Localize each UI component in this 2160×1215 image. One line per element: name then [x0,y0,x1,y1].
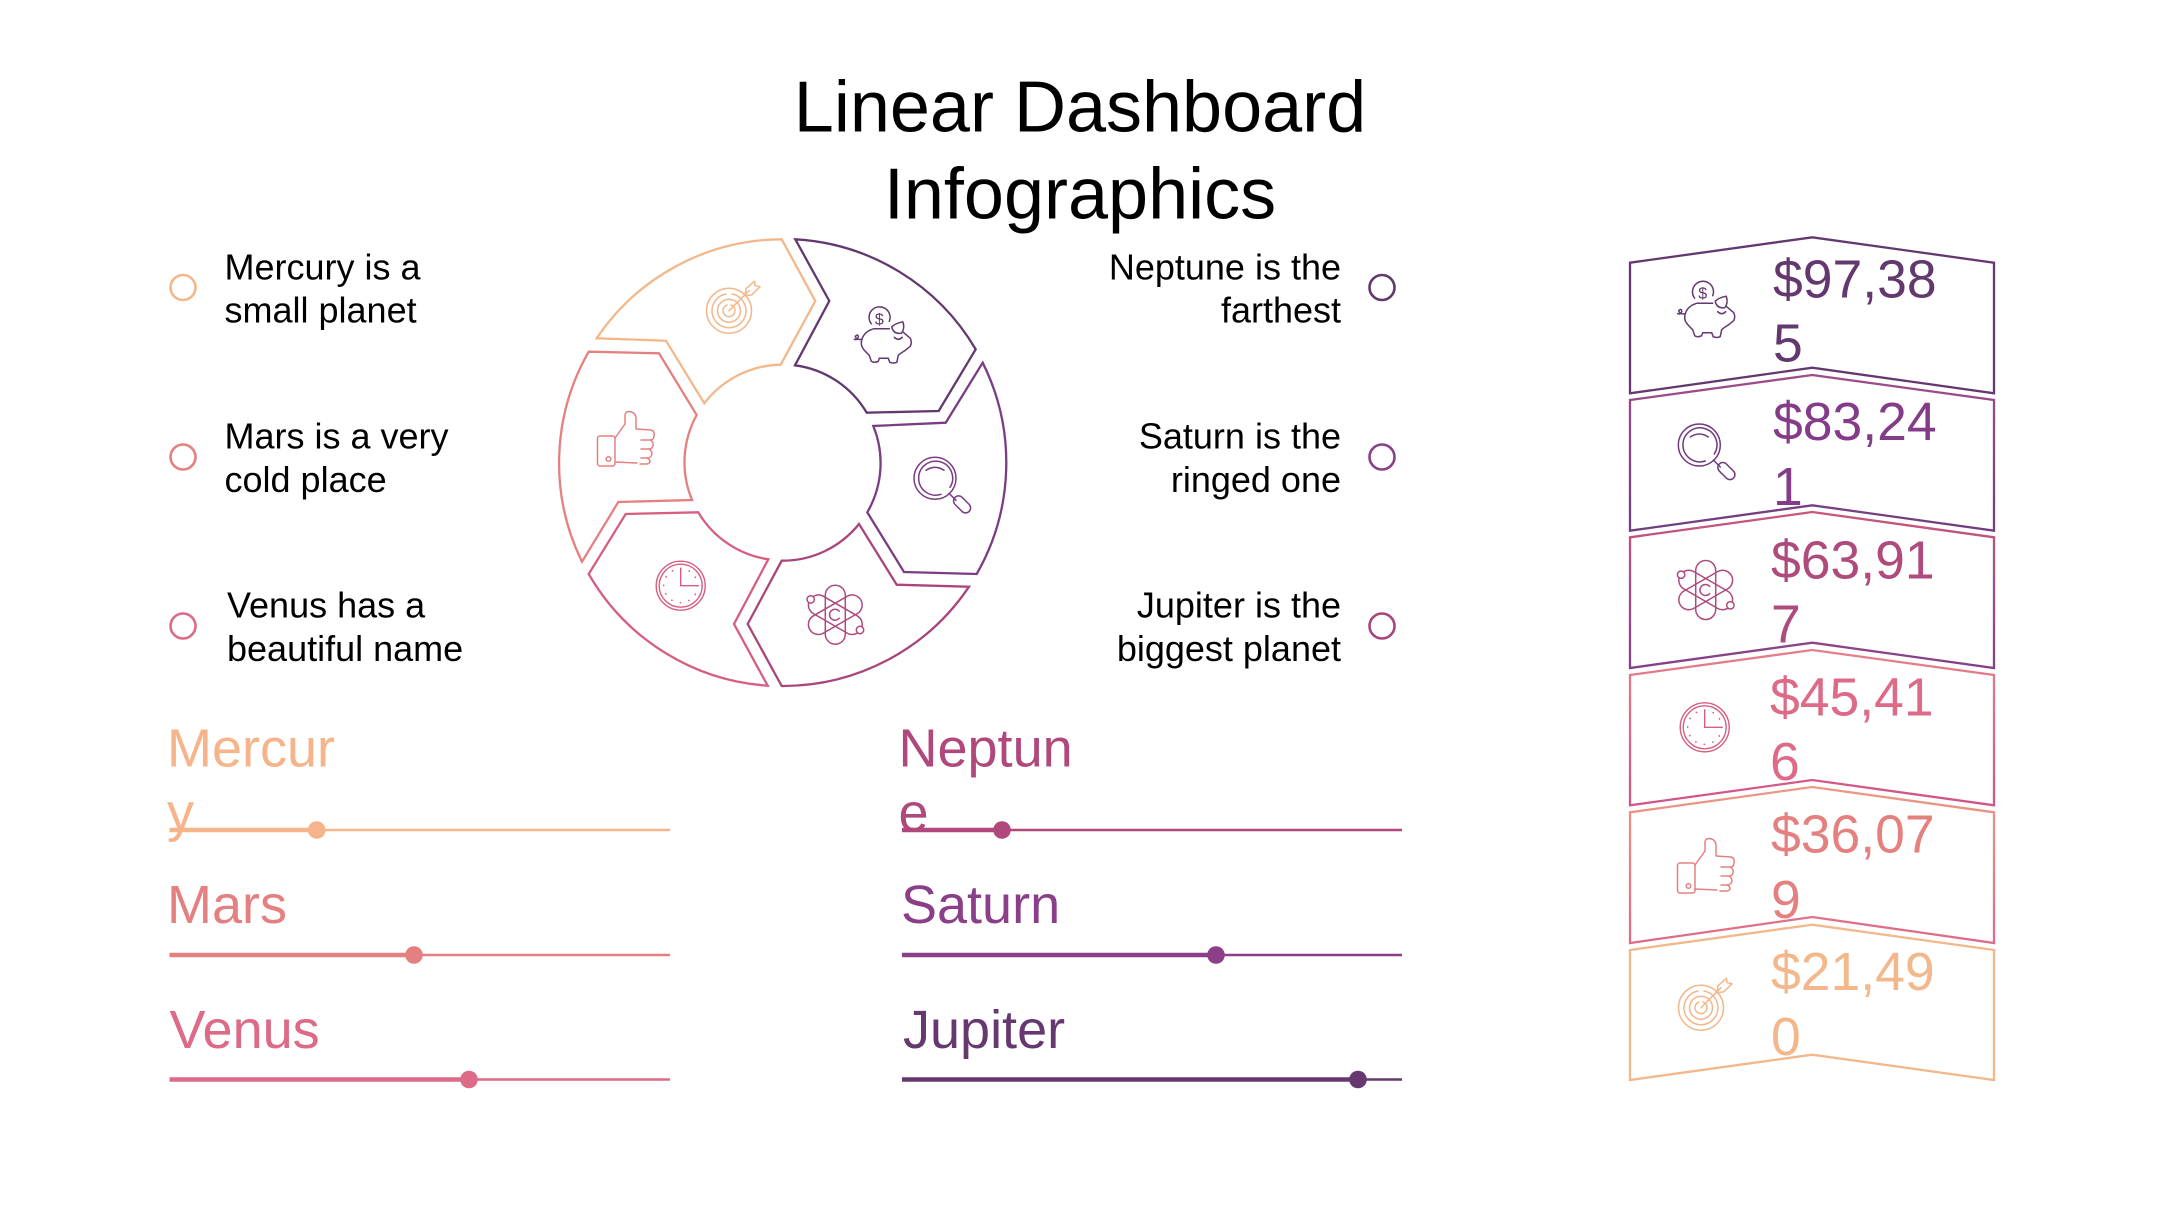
panel: atom value: 7 [1771,596,1801,655]
item: Neptune: Neptune is the [1109,246,1341,288]
slider: Mars [167,875,670,964]
slider: Mercury [167,718,670,843]
segment: atom [748,524,969,686]
item: Venus: Venus has a [227,584,426,626]
panel: piggy bank value [1630,237,1994,393]
item: Jupiter: Jupiter is the [1137,584,1341,626]
segment: clock [589,512,768,686]
legend right [1109,246,1394,669]
panel: thumbs up value [1630,787,1994,943]
title: Infographics [884,154,1276,234]
slider: Jupiter: Jupiter [903,1000,1065,1060]
segment: piggy bank [795,239,976,413]
item: Mars: Mars is a very [224,416,449,456]
panel: magnifier value [1630,375,1994,531]
panel: atom value [1630,512,1994,668]
panel: atom value: $63,91 [1771,531,1935,590]
slider: Jupiter [902,1000,1402,1088]
legend left [170,246,463,669]
title: Linear Dashboard [794,68,1366,148]
item: Saturn [1139,416,1394,500]
slider: Mercury: Mercur [167,718,335,778]
panel: piggy bank value: 5 [1773,315,1803,374]
item: Saturn: Saturn is the [1139,416,1341,456]
item: Mercury: small planet [224,290,417,330]
panel: thumbs up value: 9 [1771,871,1801,930]
item: Venus [170,584,463,669]
panel: clock value: $45,41 [1770,669,1934,728]
cycle diagram [559,239,1006,686]
item: Jupiter [1117,584,1394,669]
panel: clock value [1630,650,1994,805]
panel: piggy bank value: $97,38 [1773,250,1937,309]
slider: Mars: Mars [167,875,287,935]
slider: Venus [170,1000,670,1088]
panel: target value: 0 [1771,1008,1801,1067]
slider: Venus: Venus [170,1000,320,1060]
item: Mercury [170,246,422,330]
item: Mercury: Mercury is a [224,246,422,288]
item: Venus: beautiful name [227,628,463,669]
item: Neptune [1109,246,1394,330]
slider: Neptune: e [898,783,929,843]
panel stack [1630,237,1994,1080]
slider: Neptune [898,718,1402,843]
slider: Mercury: y [167,783,194,843]
item: Saturn: ringed one [1171,459,1341,500]
panel: thumbs up value: $36,07 [1771,805,1935,864]
panel: target value [1630,925,1994,1080]
segment: thumbs up [559,352,697,562]
panel: magnifier value: $83,24 [1773,393,1937,452]
segment: target [597,239,815,403]
item: Mars [170,416,449,500]
slider: Saturn: Saturn [901,875,1060,935]
panel: target value: $21,49 [1771,943,1935,1002]
segment: magnifying glass [867,363,1006,574]
panel: magnifier value: 1 [1773,458,1803,517]
item: Mars: cold place [224,459,387,500]
item: Jupiter: biggest planet [1117,628,1341,669]
slider: Neptune: Neptun [898,718,1073,778]
panel: clock value: 6 [1770,733,1800,792]
slider: Saturn [901,875,1402,964]
item: Neptune: farthest [1221,290,1341,330]
